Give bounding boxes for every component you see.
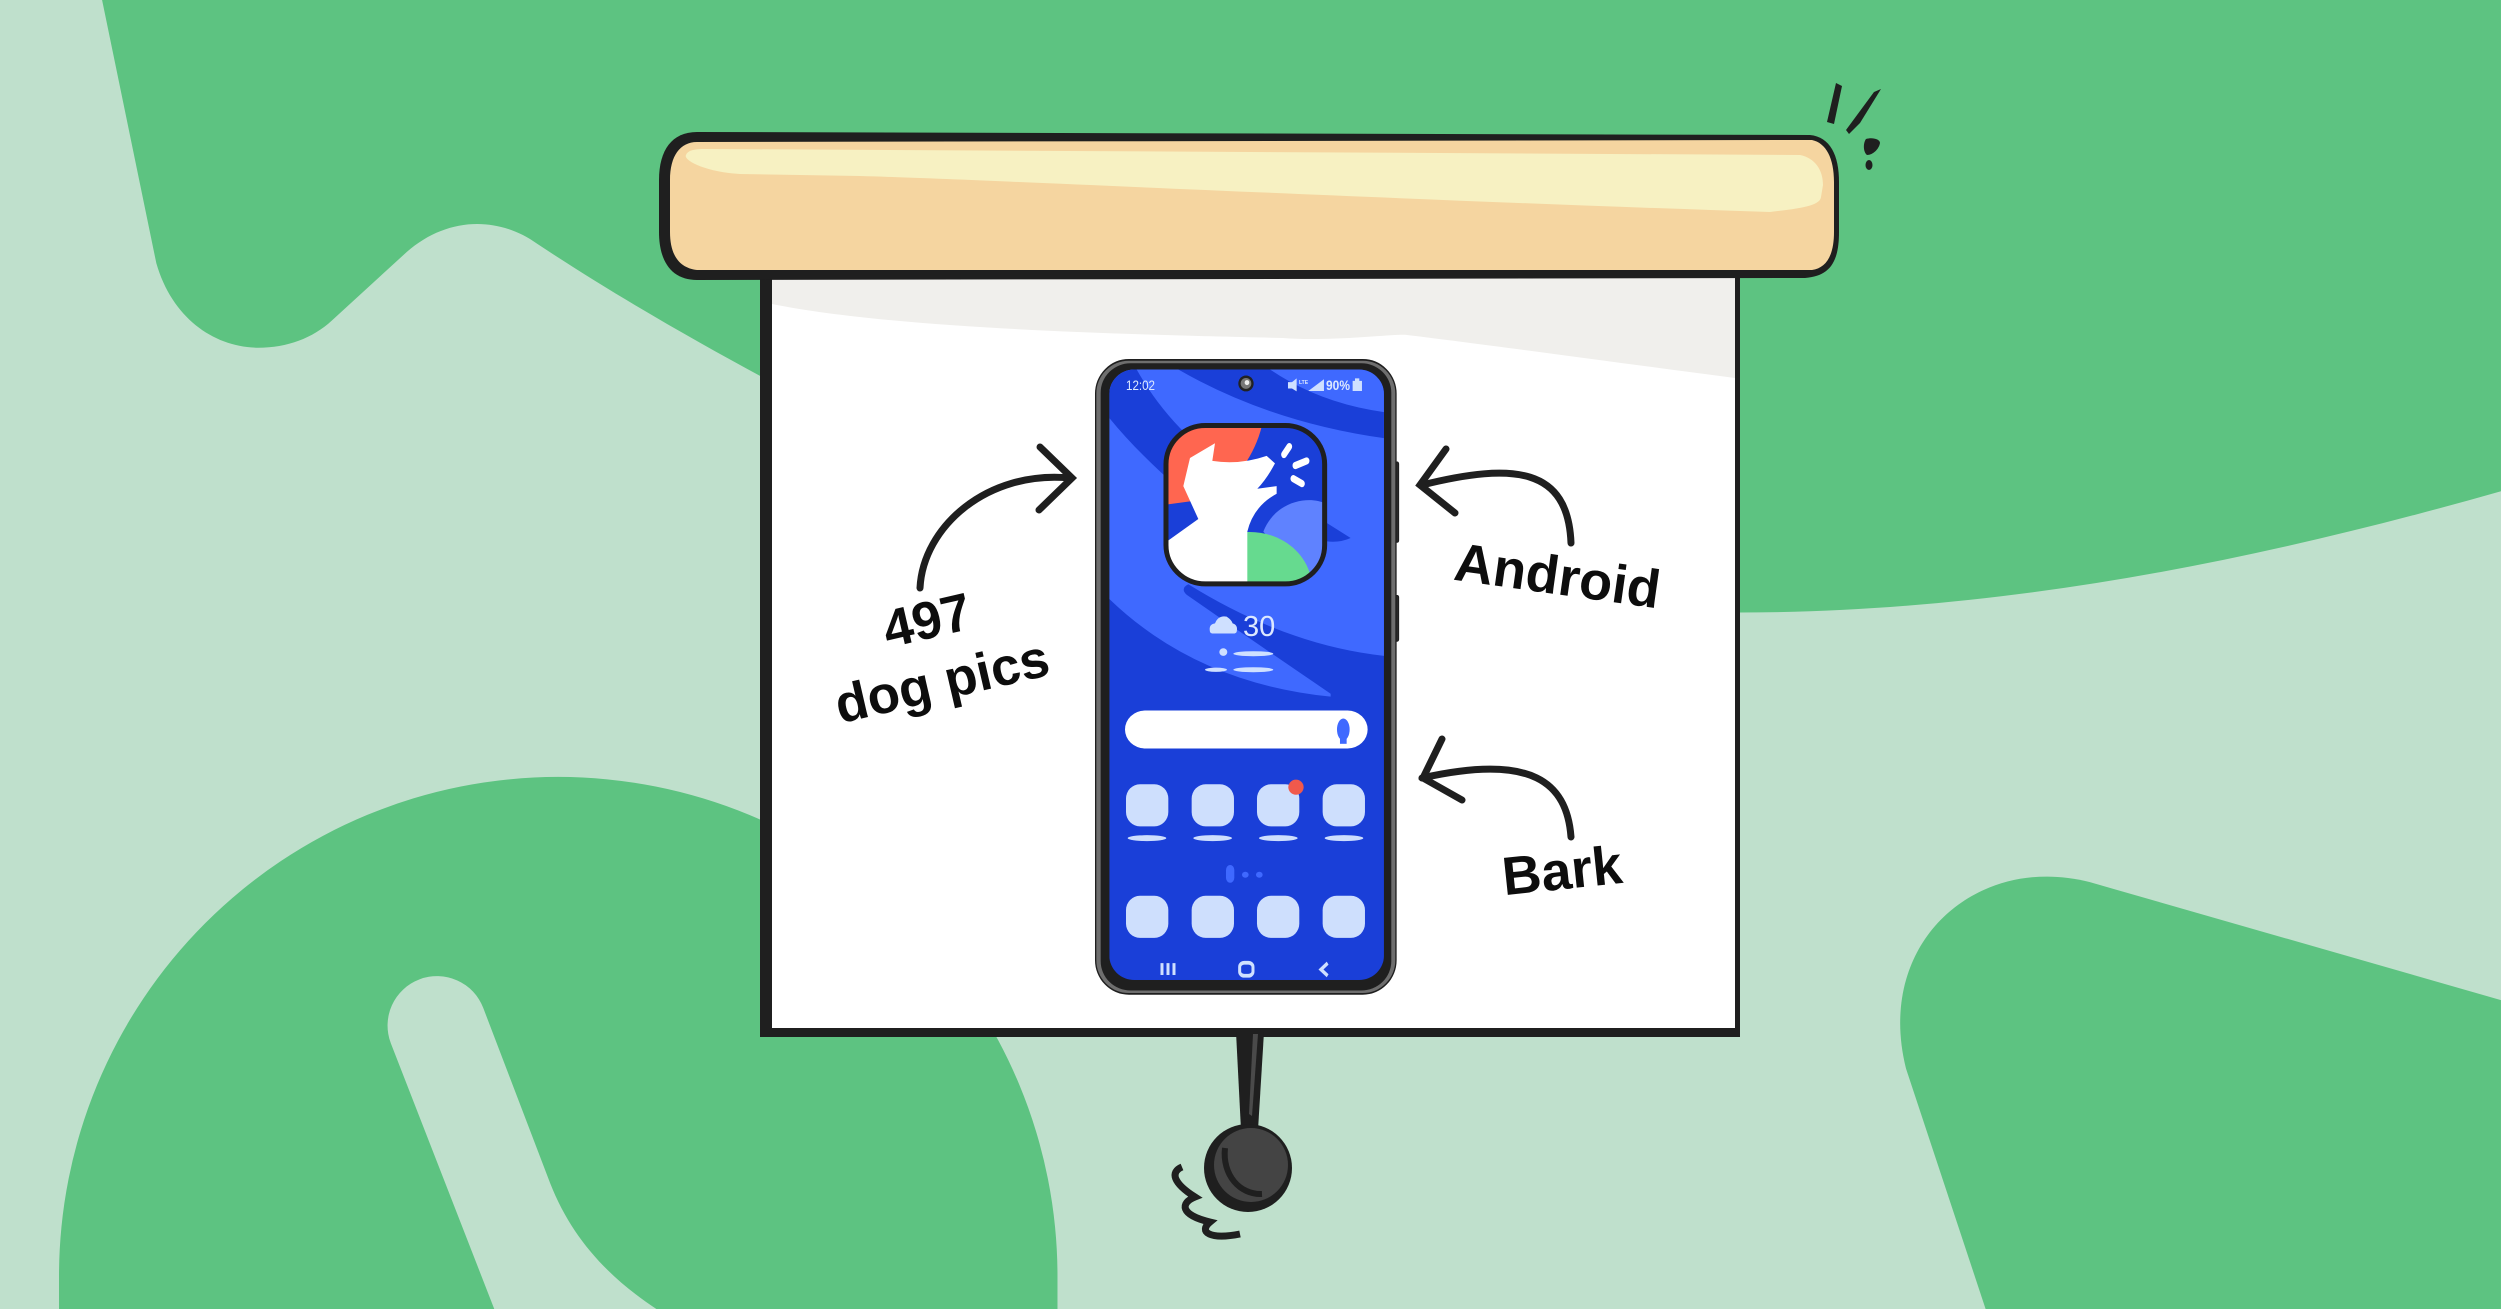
camera bbox=[1238, 375, 1254, 391]
projector screen bbox=[760, 270, 1740, 1037]
app grid row 1 bbox=[1126, 780, 1365, 841]
phone body bbox=[1096, 360, 1396, 994]
arrow: Bark bbox=[1422, 739, 1571, 837]
app icon bbox=[1166, 426, 1327, 586]
page dots bbox=[1226, 865, 1263, 883]
status LTE: LTE bbox=[1299, 380, 1309, 386]
status icons bbox=[1288, 378, 1362, 391]
search bar bbox=[1125, 711, 1368, 748]
label: 497 dog pics: dog pics bbox=[829, 629, 1055, 735]
status battery: 90% bbox=[1326, 377, 1350, 393]
spark marks bbox=[1827, 83, 1881, 170]
label: 497 dog pics: 497 bbox=[877, 582, 977, 660]
navigation bar bbox=[1162, 963, 1328, 976]
label: Android: Android bbox=[1451, 532, 1664, 620]
temperature: 30 bbox=[1243, 611, 1275, 643]
arrow: 497 dog pics bbox=[920, 447, 1072, 588]
arrow: Android bbox=[1420, 449, 1571, 543]
pull cord and knob bbox=[1175, 1032, 1292, 1236]
app grid row 2 bbox=[1126, 896, 1365, 938]
label: 497 dog pics bbox=[829, 582, 1055, 735]
roller bar bbox=[659, 132, 1839, 280]
weather widget bbox=[1205, 616, 1273, 672]
phone screen wallpaper bbox=[1109, 370, 1384, 980]
status time: 12:02 bbox=[1126, 377, 1155, 393]
phone bbox=[1096, 360, 1399, 994]
label: Bark: Bark bbox=[1499, 835, 1626, 907]
side buttons bbox=[1393, 462, 1399, 641]
